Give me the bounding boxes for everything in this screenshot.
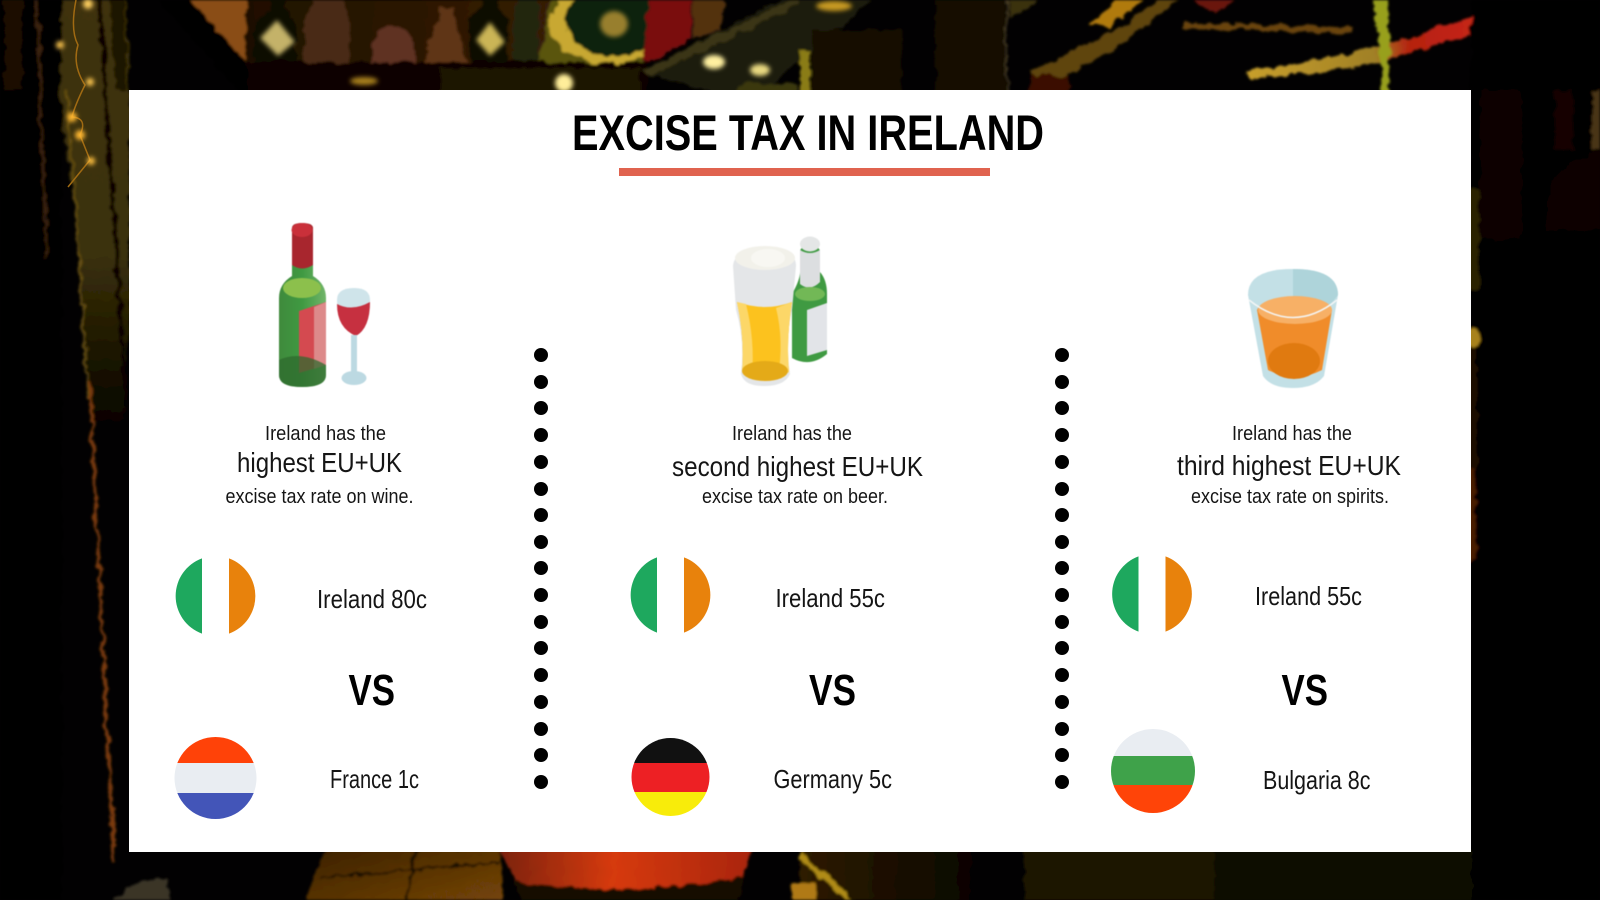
- text: wine description: excise tax rate on wine.: [226, 486, 414, 508]
- flag: Ireland: [1112, 554, 1192, 634]
- right wood wall: [1465, 0, 1600, 900]
- label: Ireland 55c: Ireland 55c: [776, 583, 885, 613]
- text: beer description: excise tax rate on beer.: [702, 486, 888, 508]
- text: beer description: second highest EU+UK: [672, 451, 923, 482]
- flag: Bulgaria: [1110, 728, 1196, 814]
- text: spirits description: Ireland has the: [1232, 423, 1352, 445]
- ceiling lights: [350, 1, 852, 92]
- bottle labels: [260, 11, 628, 56]
- garlands on ceiling: [1030, 0, 1480, 94]
- divider: right dots: [1055, 348, 1069, 789]
- label: VS: VS: [809, 666, 856, 715]
- string lights: [56, 0, 95, 187]
- flag: Germany: [632, 738, 710, 816]
- label: Bulgaria 8c: Bulgaria 8c: [1263, 765, 1370, 795]
- text: spirits description: excise tax rate on spirits.: [1191, 486, 1389, 508]
- label: Germany 5c: Germany 5c: [774, 764, 892, 794]
- bottles on shelf: [254, 0, 538, 62]
- text: beer description: Ireland has the: [732, 423, 852, 445]
- icon: wine bottle and glass: [279, 223, 370, 387]
- neon sign: [536, 0, 724, 64]
- label: VS: VS: [348, 666, 395, 715]
- icon: whisky glass: [1248, 269, 1338, 388]
- label: VS: VS: [1282, 666, 1328, 715]
- column: beer: [630, 236, 923, 820]
- angled beam: [640, 0, 1060, 94]
- label: Ireland 80c: Ireland 80c: [317, 584, 427, 614]
- bottom floor and barrel: [110, 848, 1472, 900]
- flag: Ireland: [176, 556, 256, 636]
- title underline: [619, 168, 990, 176]
- text: spirits description: [1177, 423, 1401, 508]
- text: beer description: [672, 423, 923, 508]
- text: wine description: highest EU+UK: [237, 447, 402, 478]
- text: wine description: [226, 423, 414, 508]
- top wall and shelf: [148, 0, 648, 94]
- text: wine description: Ireland has the: [265, 423, 386, 445]
- flag: France: [174, 737, 256, 819]
- column: spirits: [1110, 269, 1401, 814]
- title: EXCISE TAX IN IRELAND: [572, 105, 1044, 161]
- flag: Ireland: [630, 555, 710, 635]
- white panel: [129, 90, 1471, 852]
- divider: left dots: [534, 348, 548, 789]
- label: France 1c: France 1c: [330, 764, 419, 794]
- column: wine: [170, 223, 427, 826]
- label: Ireland 55c: Ireland 55c: [1255, 581, 1362, 611]
- left wood pillar: [0, 0, 130, 900]
- text: spirits description: third highest EU+UK: [1177, 450, 1401, 481]
- icon: beer glass and bottle: [733, 236, 827, 386]
